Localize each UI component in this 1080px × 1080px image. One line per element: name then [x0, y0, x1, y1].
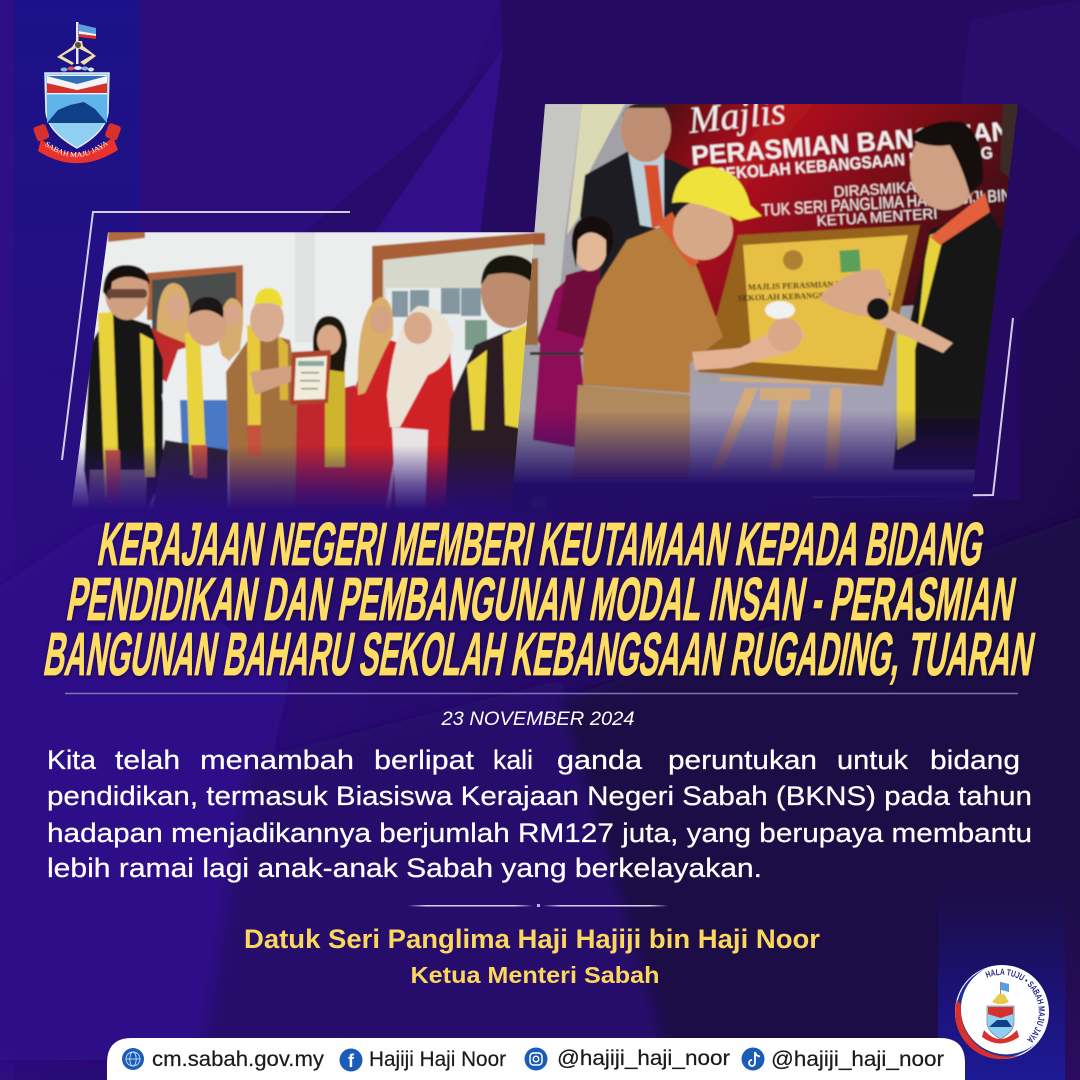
small divider: [408, 904, 668, 907]
man left black: [84, 265, 163, 520]
photo: group holding certificate: [70, 232, 548, 522]
banner text: Majlis: [686, 90, 788, 142]
chief minister: trousers and shirt: [572, 167, 805, 500]
man white shirt: [150, 297, 228, 520]
body text: lebih ramai lagi anak-anak Sabah yang berkelayakan.: [47, 853, 762, 883]
facebook name: Hajiji Haji Noor: [369, 1048, 506, 1071]
beige hijab woman: [150, 282, 191, 383]
banner text: TUK SERI PANGLIMA HAJI HAJIJI BIN: [761, 186, 1012, 220]
divider under title: [65, 692, 1018, 694]
banner backdrop: [660, 100, 1020, 320]
body text: menambah: [200, 745, 354, 775]
body text: [47, 745, 1032, 883]
body text: peruntukan: [668, 745, 817, 775]
logo: Sabah coat of arms: [34, 22, 121, 164]
website: cm.sabah.gov.my: [152, 1048, 325, 1071]
photo: plaque signing: [513, 104, 1018, 512]
banner text: [688, 104, 1008, 228]
motto scroll: [34, 123, 121, 164]
plaque: MAJLIS PERASMIAN BANGUNAN: [748, 277, 886, 292]
banister: [530, 352, 585, 355]
chief minister centre: [226, 288, 298, 512]
footer contact bar: [107, 1038, 965, 1080]
seal: Hala Tuju Sabah Maju Jaya: HALA TUJU • SABAH MAJU JAYA: [985, 968, 1045, 1042]
easel: [712, 377, 875, 470]
banner text: SEKOLAH KEBANGSAAN RUGADING: [715, 143, 993, 184]
photo frame lines: [62, 212, 1013, 497]
tiktok handle: @hajiji_haji_noor: [771, 1048, 944, 1071]
body text: bidang: [930, 745, 1020, 775]
bottom fade: [513, 413, 980, 486]
banner text: KETUA MENTERI: [816, 206, 938, 230]
body text: kali: [493, 745, 533, 775]
icon: instagram: [524, 1048, 548, 1070]
body text: untuk: [837, 745, 909, 775]
woman cream hijab: [387, 306, 458, 512]
man dark batik: [445, 255, 540, 512]
seal: Hala Tuju Sabah Maju Jaya: [955, 965, 1049, 1059]
flag: [79, 24, 96, 39]
body text: hadapan menjadikannya berjumlah RM127 juta, yang berupaya membantu: [47, 818, 1032, 848]
portrait in banner: [579, 104, 700, 282]
attribution name: Datuk Seri Panglima Haji Hajiji bin Haji Noor: [244, 924, 820, 954]
hijab woman behind: [219, 298, 243, 365]
body text: pendidikan, termasuk Biasiswa Kerajaan Negeri Sabah (BKNS) pada tahun: [47, 781, 1032, 811]
plaque: SEKOLAH KEBANGSAAN RUGADING: [738, 288, 892, 303]
body text: berlipat: [374, 745, 475, 775]
body text: ganda: [557, 745, 643, 775]
icon: globe: [122, 1048, 144, 1070]
white ribbon: [765, 301, 795, 319]
shield: [45, 73, 109, 148]
date: 23 NOVEMBER 2024: [440, 709, 634, 730]
icon: facebook: [340, 1048, 362, 1072]
windows: [146, 232, 534, 351]
body text: telah: [115, 745, 180, 775]
instagram handle: @hajiji_haji_noor: [557, 1047, 730, 1070]
seal arms: [982, 982, 1019, 1044]
woman beige hijab red dress: [351, 296, 398, 507]
concrete pillar: [532, 104, 582, 346]
certificate: [290, 350, 331, 405]
attribution role: Ketua Menteri Sabah: [410, 962, 660, 988]
crest arms: [57, 41, 96, 65]
right man: black shirt and sash: [820, 104, 1018, 470]
woman in magenta: [533, 216, 613, 450]
plaque: [698, 225, 920, 386]
cloth: [690, 372, 894, 441]
icon: tiktok: [742, 1048, 764, 1070]
title: [40, 510, 1040, 689]
motto scroll: SABAH MAJU JAYA: [45, 142, 108, 158]
banner text: DIRASMIKAN OLEH: [833, 176, 972, 201]
person at left edge: [525, 257, 540, 346]
banner text: PERASMIAN BANGUNAN: [690, 116, 1011, 171]
icon: facebook: f: [348, 1051, 355, 1071]
woman dark hair: [295, 316, 358, 512]
body text: Kita: [47, 745, 97, 775]
